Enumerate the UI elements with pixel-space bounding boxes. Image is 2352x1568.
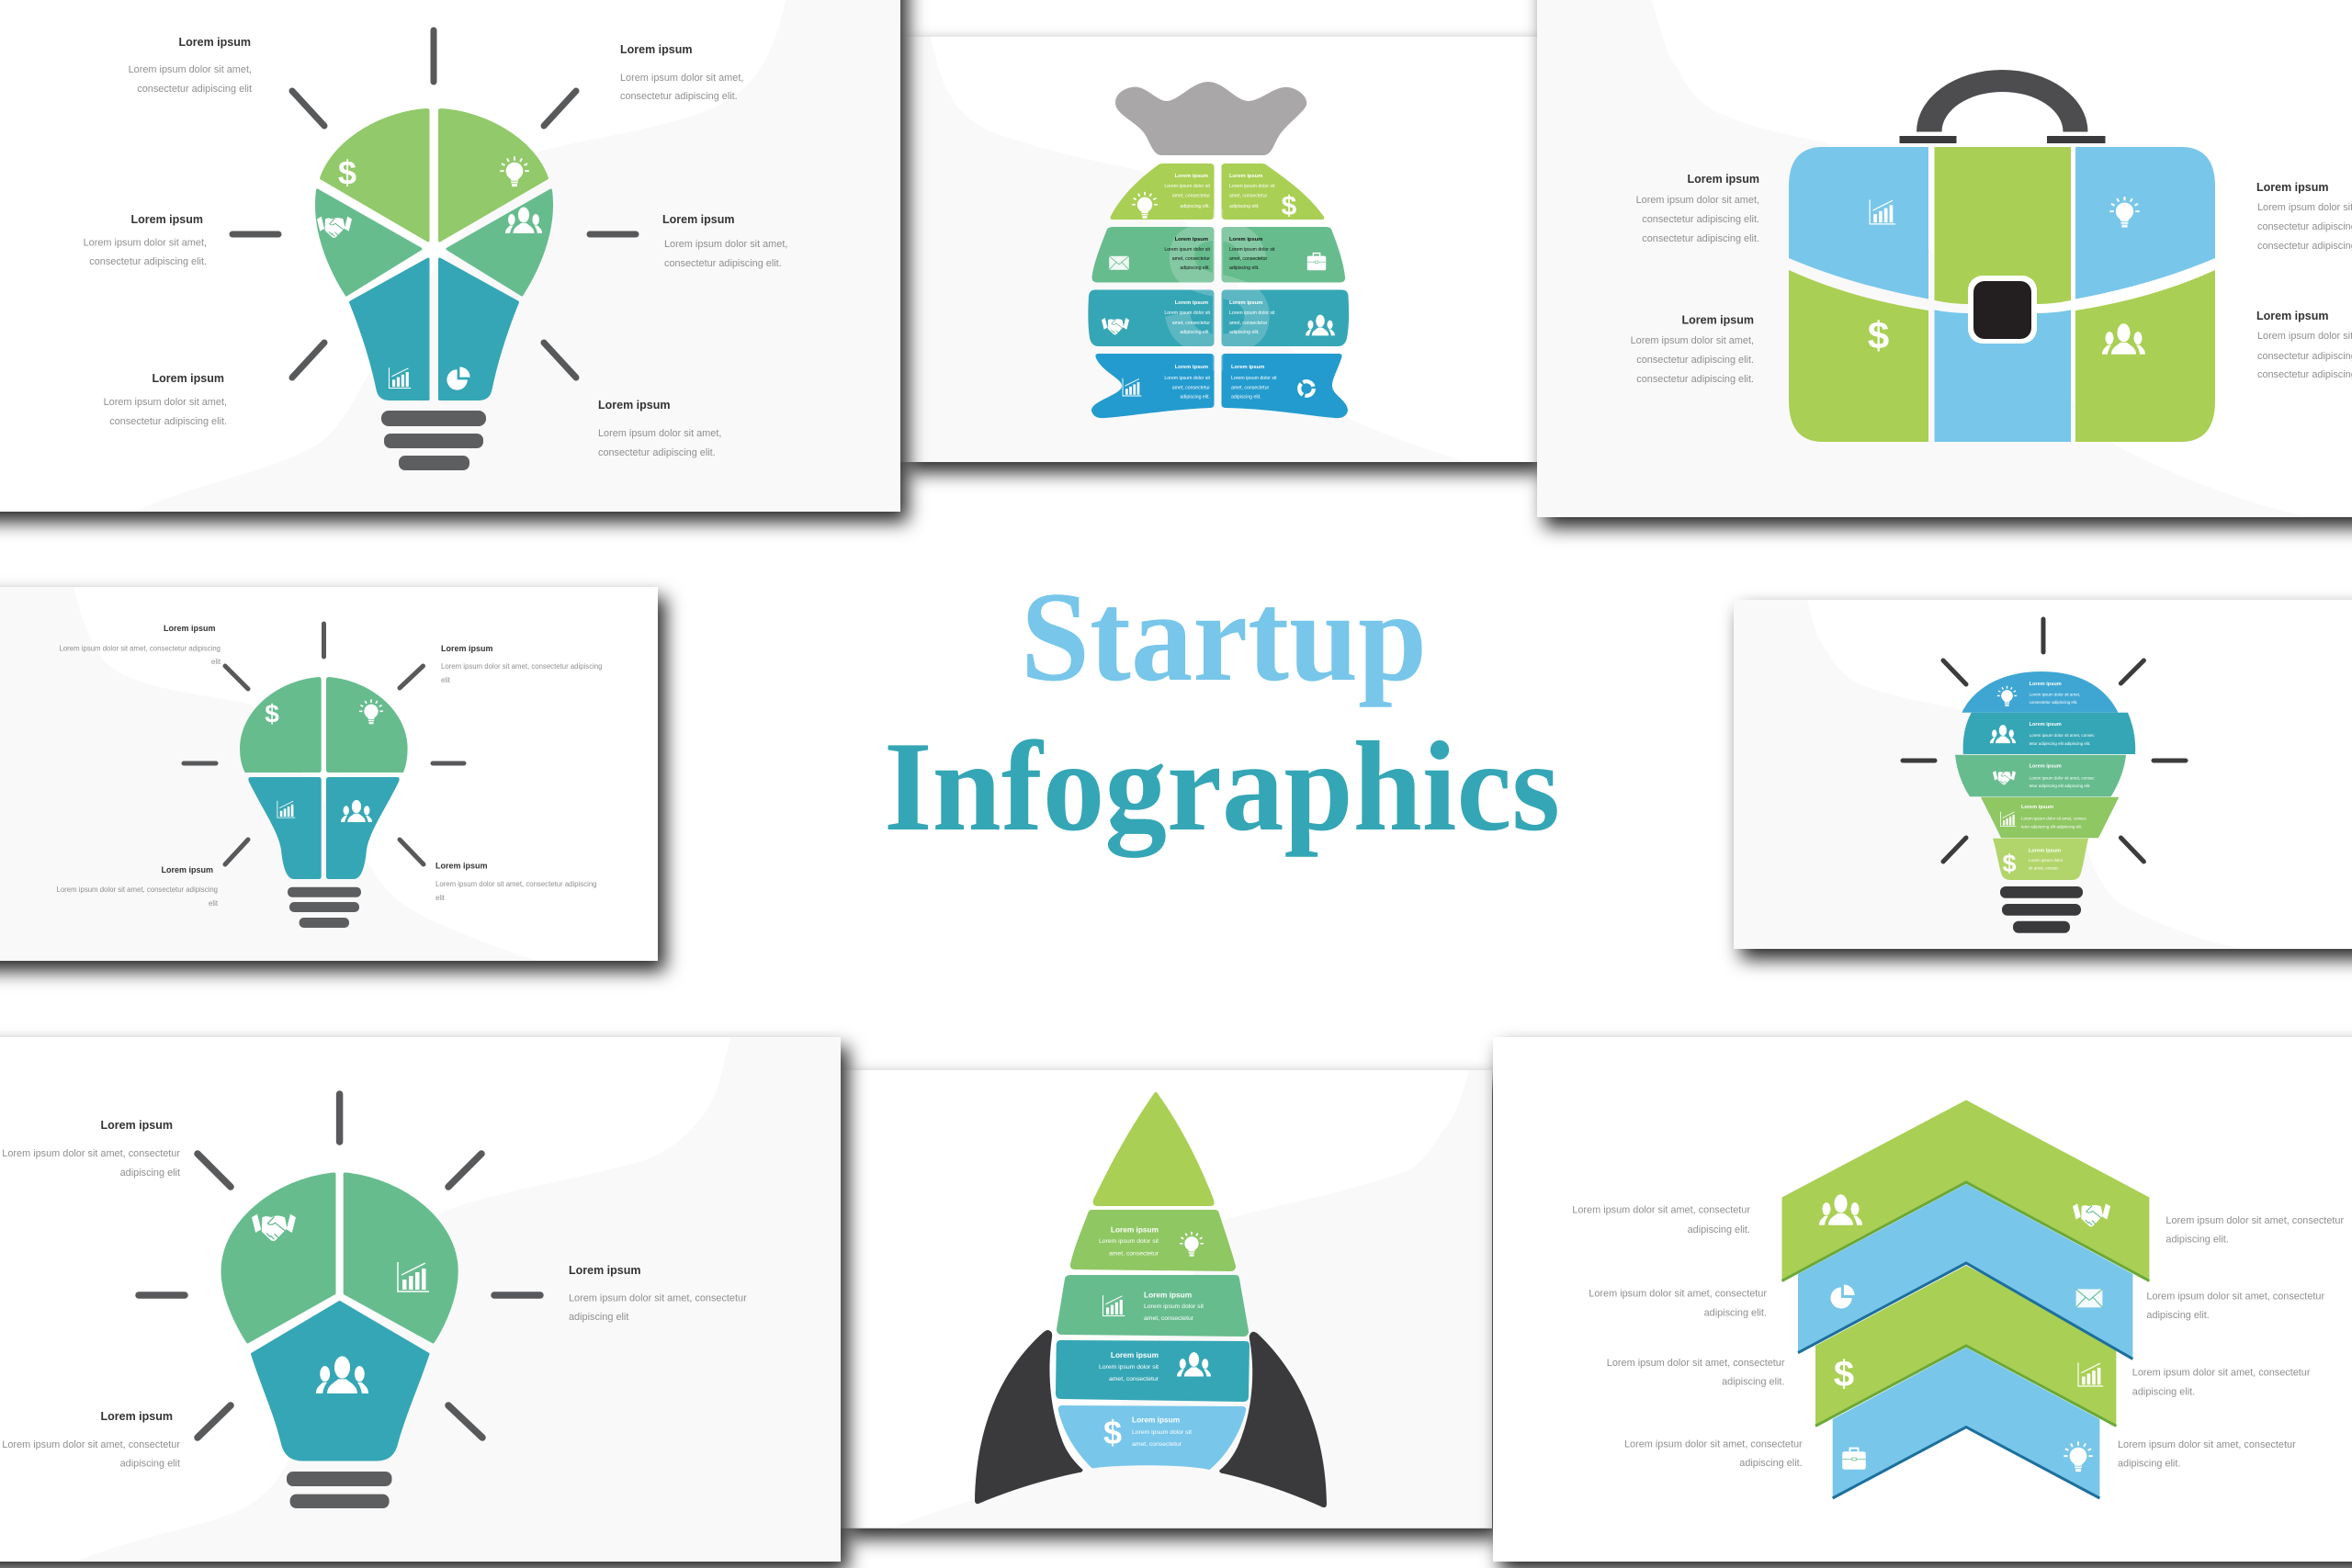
callout: left 2: Lorem ipsum dolor sit amet, consectetur [1589,1289,1767,1300]
callout: bottom left [56,865,219,908]
rocket labels: Lorem ipsum [1144,1290,1192,1299]
bag labels: Lorem ipsum dolor sit [1164,310,1211,316]
rocket labels: Lorem ipsum dolor sit [1099,1364,1159,1371]
callout: bottom left: Lorem ipsum dolor sit amet, [104,397,227,408]
light rays [232,30,636,378]
bag icons [1102,191,1335,396]
callout: right 3: adipiscing elit. [2132,1386,2195,1397]
bag labels: amet, consectetur [1172,193,1210,198]
light rays [184,624,464,864]
callout: bottom right: Lorem ipsum dolor sit amet, [598,428,721,439]
panel: briefcase slide [1537,0,2352,517]
bag labels: adipiscing elit. [1229,204,1260,209]
callout: top right: Lorem ipsum dolor sit amet, [620,73,743,84]
callout: middle right: Lorem ipsum [662,213,735,226]
bulb base [381,411,486,470]
title: Startup [1021,566,1427,708]
callout: left 4 [1624,1438,1803,1469]
callout: bottom right: Lorem ipsum [435,862,488,871]
callout: left 1: adipiscing elit. [1688,1224,1750,1235]
briefcase feet [1900,136,2106,143]
rocket labels: Lorem ipsum [1111,1225,1159,1235]
callout: lower left: consectetur adipiscing elit. [1636,355,1754,366]
briefcase icons [1868,197,2145,356]
bulb segments [240,677,408,879]
callout: left 3 [1607,1358,1785,1387]
title [884,566,1560,858]
money bag segments [1088,164,1349,418]
bulb icons [317,154,542,390]
bag labels: Lorem ipsum dolor sit [1229,184,1275,189]
callout: right 2: adipiscing elit. [2146,1310,2210,1321]
layer labels: Lorem ipsum dolor sit amet, consec [2021,816,2087,821]
light rays [1903,619,2186,862]
panel: bulb with six segments [0,0,900,512]
bag labels: Lorem ipsum dolor sit [1164,184,1211,189]
layer labels: Lorem ipsum [2030,682,2062,687]
callout: upper left: adipiscing elit [120,1168,180,1179]
layer labels [2021,682,2095,871]
bag labels: adipiscing elit. [1231,395,1261,400]
callout: lower right [2256,310,2352,380]
callout: top right: Lorem ipsum dolor sit amet, consectetur adipiscing [441,662,603,671]
callout: right: Lorem ipsum dolor sit amet, consectetur [569,1292,747,1303]
bag labels: Lorem ipsum [1229,237,1262,243]
rocket labels: Lorem ipsum [1111,1350,1159,1359]
layer labels: tetur adipiscing elit adipiscing elit. [2021,825,2083,829]
callout: upper left: consectetur adipiscing elit. [1642,233,1759,244]
callout: bottom left: consectetur adipiscing elit. [109,416,227,427]
layer labels: Lorem ipsum [2021,805,2053,810]
rocket labels: amet, consectetur [1109,1251,1159,1257]
bag labels: Lorem ipsum [1231,365,1264,370]
watermark dollar: $ [1162,176,1272,399]
slide background [0,0,900,512]
callout: upper left: consectetur adipiscing elit. [1642,214,1759,225]
callout: middle right: consectetur adipiscing elit. [664,258,782,269]
briefcase icons: $ [1868,314,1889,356]
bag labels: amet, consectetur [1229,256,1268,262]
chevron 2 [1798,1184,2132,1359]
bulb icons: $ [338,154,356,191]
callout: right: Lorem ipsum [569,1264,641,1277]
bulb base [288,887,361,928]
callout: right 3 [2132,1367,2311,1397]
bag labels [1164,174,1277,400]
rocket labels: Lorem ipsum dolor sit [1144,1303,1204,1310]
bag labels: adipiscing elit. [1180,265,1210,271]
bag labels: Lorem ipsum dolor sit [1164,247,1211,253]
callout: middle left [84,213,207,267]
bag labels: amet, consectetur [1229,193,1268,198]
callout: left 1 [1572,1205,1750,1235]
bag labels: Lorem ipsum [1175,300,1208,306]
callout: bottom right: Lorem ipsum [598,399,671,412]
callout: upper right [2256,181,2352,252]
bag labels: Lorem ipsum dolor sit [1229,310,1275,316]
rocket labels: amet, consectetur [1144,1315,1194,1322]
rocket labels: amet, consectetur [1132,1441,1182,1448]
briefcase handle [1917,70,2087,132]
bulb icons [265,699,383,822]
panel: bulb with five stacked layers [1734,600,2352,949]
callout: left 2: adipiscing elit. [1704,1308,1767,1319]
layer icons [1990,686,2017,877]
callout: lower left [1631,314,1754,385]
slide background [0,587,658,961]
layer labels: Lorem ipsum dolor sit amet, consec [2030,775,2095,781]
briefcase body [1789,147,2215,442]
callout: bottom left [104,372,227,427]
layer labels: sit amet, consec [2029,865,2059,871]
rocket labels: Lorem ipsum [1132,1416,1180,1425]
rocket body segments [1056,1092,1250,1470]
callout: lower left: Lorem ipsum [101,1410,173,1423]
layer labels: Lorem ipsum [2030,722,2062,728]
callout: right 1 [2165,1215,2344,1246]
panel: stacked chevrons slide [1493,1037,2352,1562]
panel: bulb with three segments [0,1037,841,1562]
layer labels: Lorem ipsum [2030,763,2062,769]
rocket icons [1102,1232,1211,1451]
slide background [0,1037,841,1562]
slide background [1537,0,2352,517]
layer labels: Lorem ipsum dolor sit amet, consec [2030,733,2095,738]
bag labels: Lorem ipsum dolor sit [1231,376,1277,381]
callout: upper left: Lorem ipsum dolor sit amet, [1636,195,1759,206]
callout: right: adipiscing elit [569,1312,628,1323]
bag labels: Lorem ipsum [1175,365,1208,370]
slide background [1734,600,2352,949]
callout: upper left: Lorem ipsum [1687,173,1759,186]
callout: lower right: Lorem ipsum [2256,310,2328,322]
rocket icons: $ [1103,1414,1122,1451]
bag labels: amet, consectetur [1172,386,1210,391]
layer icons: $ [2002,850,2017,877]
callout: middle right [662,213,787,269]
panel: bulb with four segments [0,587,658,961]
bag labels: adipiscing elit. [1229,330,1260,335]
bulb base [2000,886,2083,933]
bag labels: Lorem ipsum [1175,174,1208,179]
bag labels: adipiscing elit. [1229,265,1260,271]
chevron icons: $ [1834,1354,1854,1394]
callout: top left [129,36,252,95]
callout: right 4: adipiscing elit. [2118,1459,2180,1470]
callout: top right [441,644,603,684]
rocket fins [975,1330,1327,1507]
callout: top left: Lorem ipsum dolor sit amet, [129,64,252,75]
callout: bottom right: consectetur adipiscing elit. [598,447,716,458]
callout: middle left: Lorem ipsum [130,213,203,226]
bulb layers [1955,671,2135,880]
slide background [841,1070,1492,1529]
callout: top right: consectetur adipiscing elit. [620,91,738,102]
callout: upper left: Lorem ipsum [101,1119,173,1132]
rocket labels: Lorem ipsum dolor sit [1099,1238,1159,1245]
bag labels: adipiscing elit. [1180,330,1210,335]
title: Infographics [884,716,1560,858]
bag labels: Lorem ipsum dolor sit [1164,376,1211,381]
callout: right 4 [2118,1439,2296,1470]
bulb icons: $ [265,700,279,728]
callout: bottom right: elit [435,894,446,902]
callout: middle right: Lorem ipsum dolor sit amet, [664,239,787,250]
rocket labels: amet, consectetur [1109,1376,1159,1382]
panel: rocket slide [841,1070,1492,1529]
callout: left 3: adipiscing elit. [1722,1376,1784,1387]
callout: upper right: Lorem ipsum [2256,181,2328,194]
callout: top left [59,624,221,666]
callout: upper left [2,1119,180,1179]
callout: middle left: consectetur adipiscing elit. [89,256,207,267]
callout: top right: Lorem ipsum [441,644,493,653]
bulb segments [316,110,552,399]
callout: lower left: Lorem ipsum dolor sit amet, consectetur [2,1439,180,1450]
callout: top right [620,43,743,102]
callout: lower left: consectetur adipiscing elit. [1636,374,1754,385]
layer labels: Lorem ipsum dolor sit amet, [2030,693,2080,696]
layer labels: Lorem ipsum [2029,849,2061,854]
bag labels: amet, consectetur [1229,321,1268,326]
callout: lower left: Lorem ipsum [1681,314,1754,327]
callout: right 2: Lorem ipsum dolor sit amet, consectetur [2146,1291,2324,1302]
callout: right 1: Lorem ipsum dolor sit amet, consectetur [2165,1215,2344,1226]
callout: right 4: Lorem ipsum dolor sit amet, consectetur [2118,1439,2296,1450]
callout: right [569,1264,747,1323]
bulb icons [252,1214,429,1393]
bag labels: adipiscing elit. [1180,204,1210,209]
bag labels: amet, consectetur [1172,256,1210,262]
callout: right 1: adipiscing elit. [2165,1235,2229,1246]
panel: money bag slide [900,37,1537,462]
callout: left 3: Lorem ipsum dolor sit amet, consectetur [1607,1358,1785,1369]
callout: bottom left: elit [209,899,219,908]
layer labels: tetur adipiscing elit adipiscing elit. [2030,741,2090,746]
callout: bottom left: Lorem ipsum [153,372,224,385]
callout: bottom right: Lorem ipsum dolor sit amet, consectetur adipiscing [435,880,597,888]
rocket labels: Lorem ipsum dolor sit [1132,1429,1192,1436]
layer labels: tetur adipiscing elit adipiscing elit. [2030,784,2090,788]
bag labels: Lorem ipsum [1229,174,1262,179]
chevron 3 [1815,1266,2116,1426]
bag labels: Lorem ipsum [1175,237,1208,243]
callout: bottom right [598,399,721,458]
callout: top left: Lorem ipsum [178,36,251,49]
callout: lower left: adipiscing elit [120,1459,180,1470]
light rays [139,1094,540,1438]
callout: top right: Lorem ipsum [620,43,693,56]
bag icons: $ [1282,191,1297,221]
callout: left 4: adipiscing elit. [1739,1458,1803,1469]
slide background [1493,1037,2352,1562]
chevron 4 [1833,1348,2099,1498]
bag labels: Lorem ipsum dolor sit [1229,247,1275,253]
callout: left 4: Lorem ipsum dolor sit amet, consectetur [1624,1438,1803,1450]
bulb segments [222,1174,457,1460]
rocket labels [1099,1225,1204,1448]
callout: bottom right [435,862,597,902]
callout: bottom left: Lorem ipsum [161,865,213,874]
bag labels: adipiscing elit. [1180,395,1210,400]
layer labels: Lorem ipsum dolor [2029,858,2064,863]
callout: left 2 [1589,1289,1767,1319]
chevron icons [1819,1194,2110,1472]
briefcase clasp [1968,276,2037,344]
bulb base [287,1472,391,1508]
callout: top left: Lorem ipsum dolor sit amet, consectetur adipiscing [59,645,220,652]
bag labels: amet, consectetur [1231,386,1270,391]
slide background [900,37,1537,462]
callout: right 3: Lorem ipsum dolor sit amet, consectetur [2132,1367,2311,1378]
money bag tie [1115,82,1306,155]
callout: middle left: Lorem ipsum dolor sit amet, [84,237,207,248]
callout: upper left [1636,173,1759,244]
callout: lower left: Lorem ipsum dolor sit amet, [1631,335,1754,346]
callout: top left: Lorem ipsum [164,624,215,633]
callout: top left: consectetur adipiscing elit [137,84,252,95]
callout: top right: elit [441,676,451,684]
chevron 1 [1782,1100,2149,1280]
callout: bottom left: Lorem ipsum dolor sit amet, consectetur adipiscing [56,886,218,894]
callout: right 2 [2146,1291,2324,1321]
callout: top left: elit [211,658,221,666]
callout: upper left: Lorem ipsum dolor sit amet, consectetur [2,1148,180,1159]
bag labels: Lorem ipsum [1229,300,1262,306]
callout: left 1: Lorem ipsum dolor sit amet, consectetur [1572,1205,1750,1216]
callout: lower left [2,1410,180,1470]
bag labels: amet, consectetur [1172,321,1210,326]
layer labels: consectetur adipiscing elit. [2030,700,2077,705]
